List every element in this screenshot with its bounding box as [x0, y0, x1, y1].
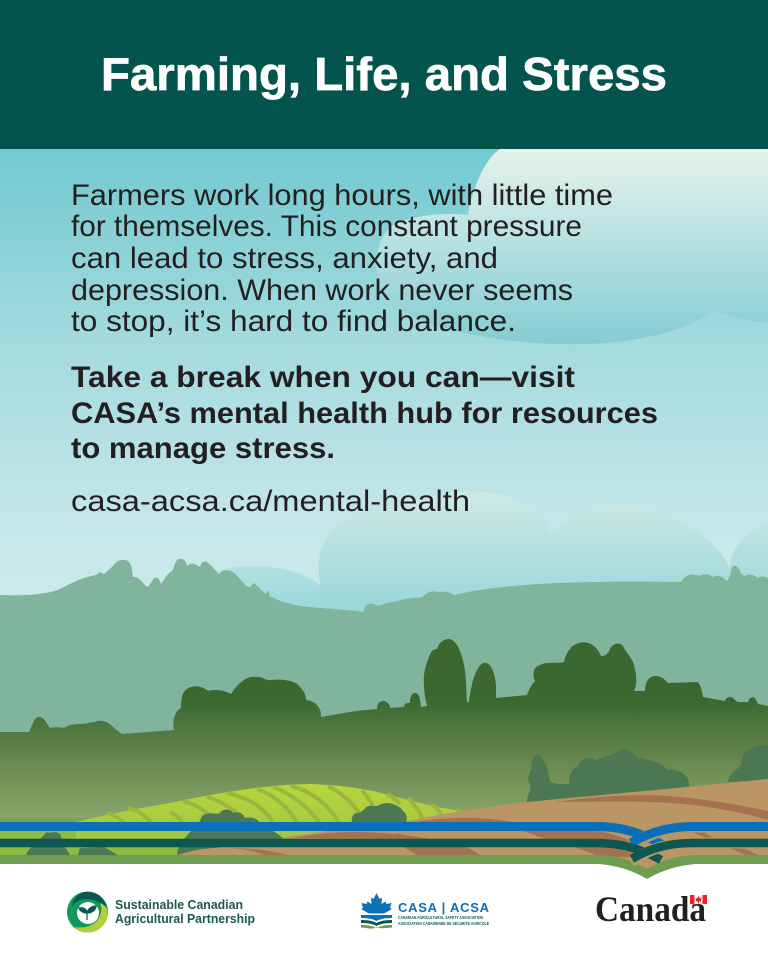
intro paragraph: Farmers work long hours, with little time — [71, 179, 613, 212]
website link: casa-acsa.ca/mental-health — [71, 485, 470, 518]
ribbon base — [0, 855, 768, 879]
logo: CASA ACSA — [361, 893, 490, 929]
cloud: small low left — [215, 566, 325, 620]
intro paragraph: can lead to stress, anxiety, and — [71, 242, 498, 275]
ribbon: blue band — [0, 826, 768, 846]
logo: CASA ACSA: ASSOCIATION CANADIENNE DE SÉCURITÉ AGRICOLE — [398, 919, 489, 926]
cloud: lower right — [319, 491, 768, 620]
call to action: to manage stress. — [71, 432, 335, 465]
logo: Sustainable Canadian Agricultural Partnership — [67, 892, 255, 932]
near dark hill with trees — [0, 639, 768, 860]
logo: Sustainable Canadian Agricultural Partnership: Sustainable Canadian — [115, 898, 243, 912]
ribbon: dark green band — [0, 843, 768, 862]
intro paragraph — [71, 179, 613, 338]
title: Farming, Life, and Stress — [101, 48, 667, 100]
background sky — [0, 149, 768, 629]
field: tan ploughed land — [170, 779, 768, 872]
logo: CASA ACSA: CASA | ACSA — [398, 900, 490, 915]
intro paragraph: depression. When work never seems — [71, 274, 573, 307]
cloud: upper right — [376, 149, 768, 344]
intro paragraph: to stop, it’s hard to find balance. — [71, 305, 516, 338]
field: lime hill with contour stripes — [76, 784, 467, 840]
logo: Sustainable Canadian Agricultural Partnership: Agricultural Partnership — [115, 912, 255, 926]
intro paragraph: for themselves. This constant pressure — [71, 210, 582, 243]
field: lime hill strip — [0, 818, 300, 856]
call to action — [71, 361, 658, 465]
furrows — [230, 795, 768, 858]
logo: Canada wordmark: Canada — [595, 889, 706, 929]
call to action: Take a break when you can—visit — [71, 361, 575, 394]
far hills with tree line — [0, 559, 768, 740]
trees in front of fields — [26, 803, 407, 855]
header band — [0, 0, 768, 149]
logo: CASA ACSA: CANADIAN AGRICULTURAL SAFETY ASSOCIATION — [398, 915, 483, 920]
mid trees — [527, 745, 768, 805]
call to action: CASA’s mental health hub for resources — [71, 397, 658, 430]
